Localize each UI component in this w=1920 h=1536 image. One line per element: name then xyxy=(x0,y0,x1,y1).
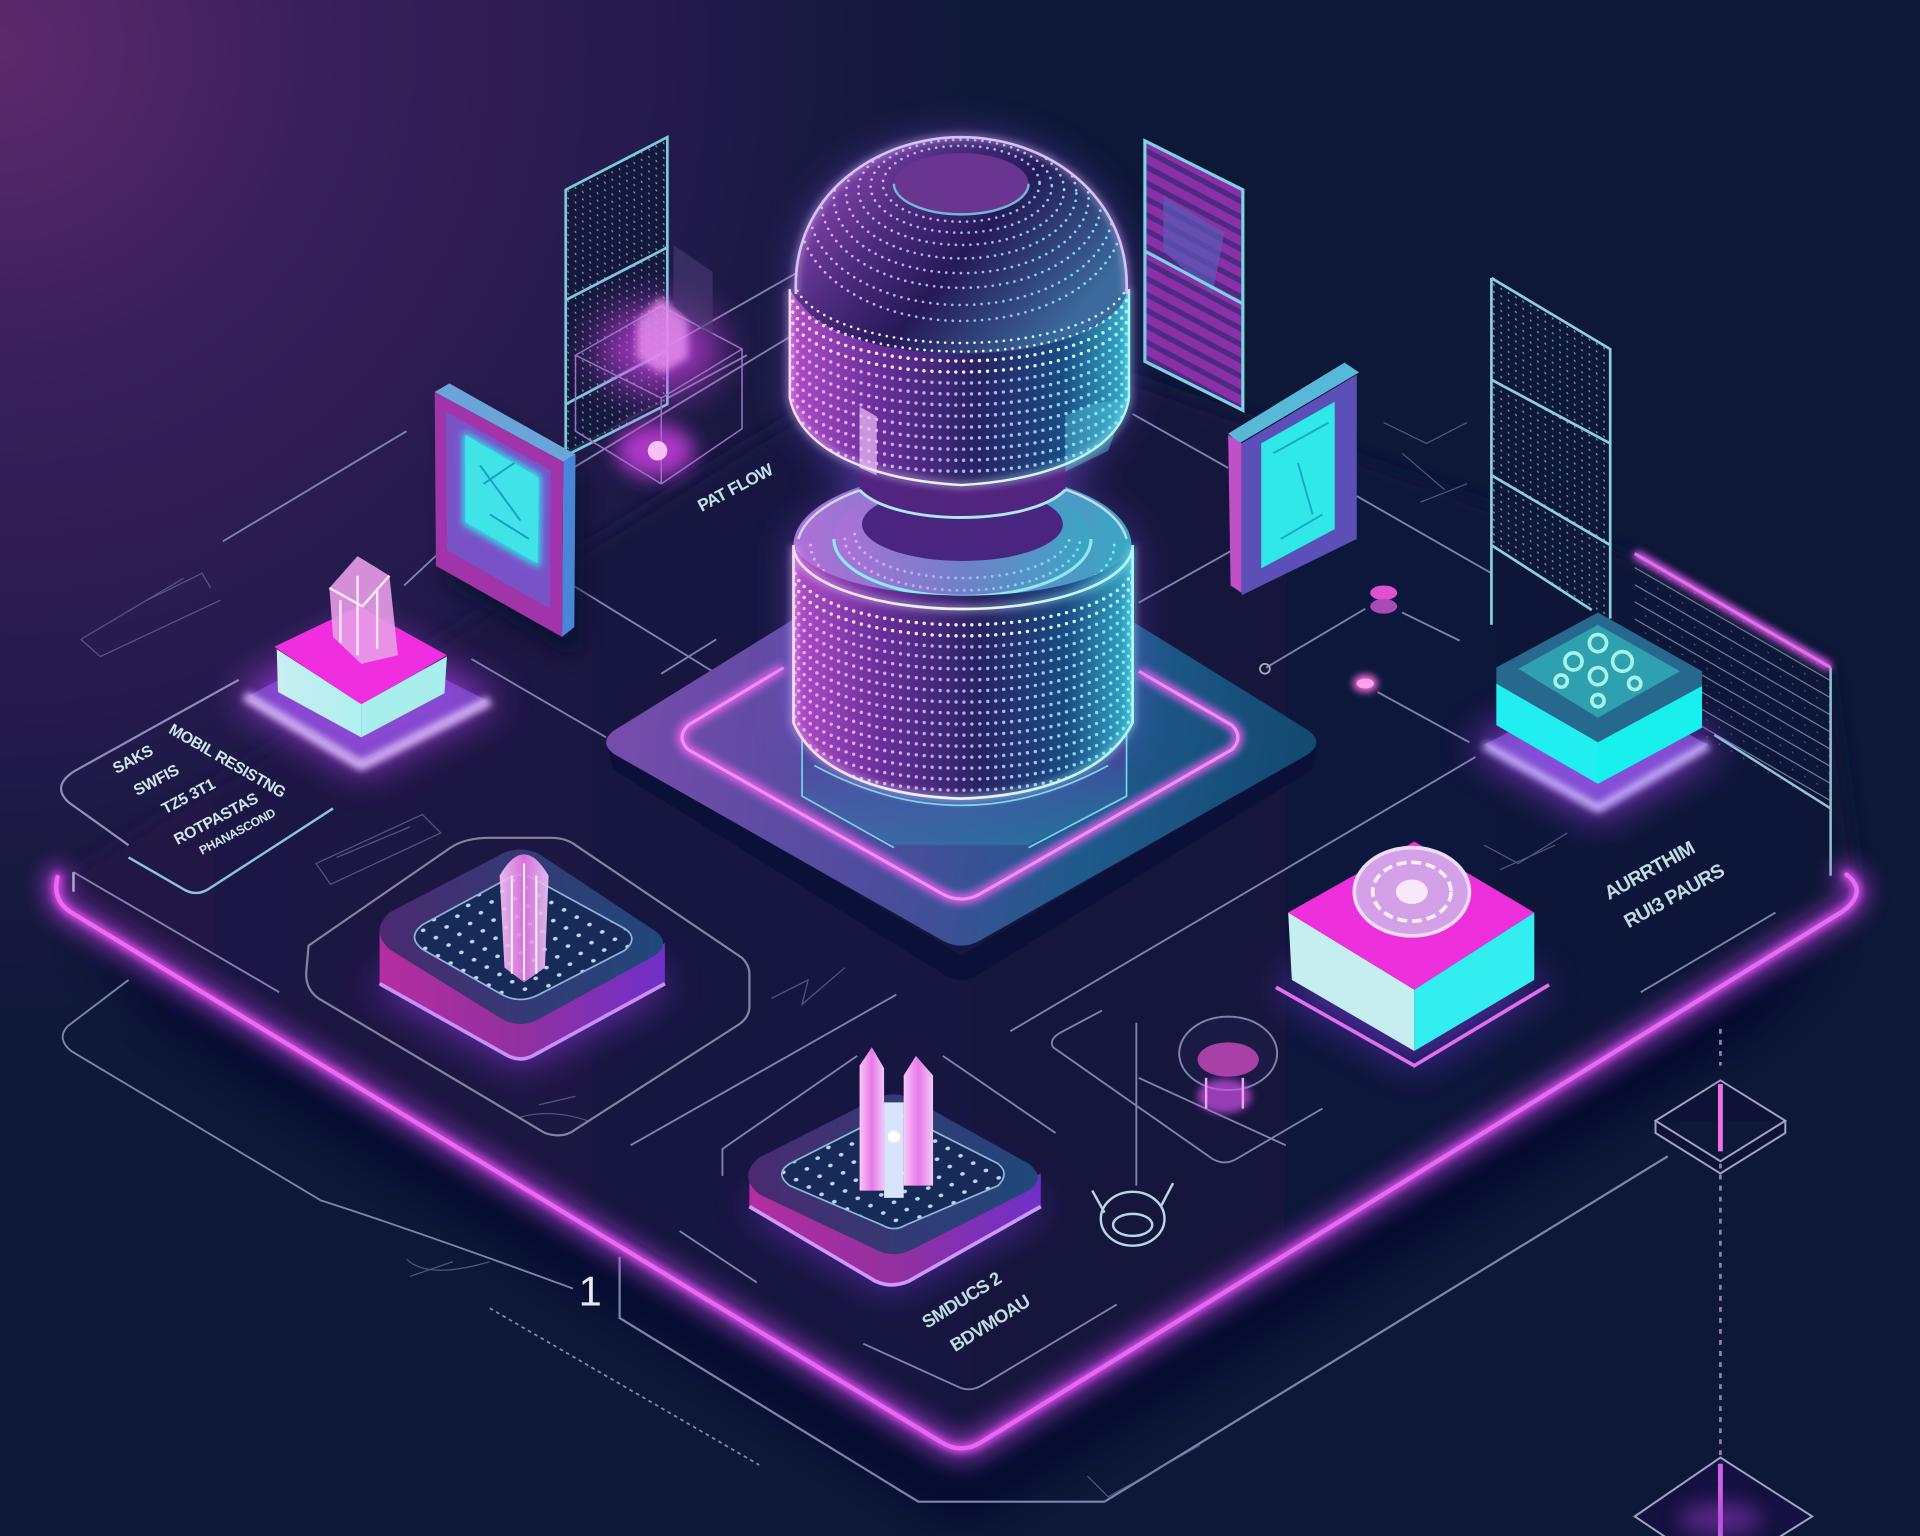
icon: right tall data panel xyxy=(1491,278,1610,625)
central dotted hologram tower xyxy=(790,110,1133,848)
module: cyan data cube xyxy=(1469,612,1722,818)
card text lines: SWFIS xyxy=(131,762,182,800)
module: processor A xyxy=(306,838,749,1135)
platform shadow xyxy=(73,937,1837,1519)
card text lines: MOBIL RESISTNG xyxy=(166,721,288,802)
crystal xyxy=(329,556,398,664)
connector scribble annotations xyxy=(81,423,1567,1497)
label: upper left caption: PAT FLOW xyxy=(694,459,777,516)
icon: left wire panel xyxy=(566,137,667,456)
tower spires xyxy=(500,854,549,982)
card text lines: PHANASCOND xyxy=(197,806,278,858)
card text lines xyxy=(110,721,288,858)
module: magenta medallion cube xyxy=(1273,841,1549,1066)
tower reflection xyxy=(802,723,1127,848)
icon: coil ring xyxy=(1179,1017,1277,1113)
neon platform edge xyxy=(56,875,1857,1448)
tower glow xyxy=(790,137,1133,802)
platform surface xyxy=(56,318,1859,1451)
dome xyxy=(793,110,1129,354)
central base slab xyxy=(606,522,1318,980)
icon: right tablet xyxy=(1228,363,1359,595)
icon: pink node dots xyxy=(1260,585,1397,692)
label: right caption xyxy=(1601,837,1729,933)
far right grid wall xyxy=(1635,554,1831,876)
lower cylinder xyxy=(793,472,1133,799)
icon: left tablet xyxy=(435,383,585,657)
tower neck xyxy=(860,404,1065,518)
icon: diamond beacon lower xyxy=(1635,1458,1812,1536)
panel: left text card xyxy=(61,680,333,893)
label: bottom caption: SMDUCS 2 xyxy=(918,1267,1005,1332)
module: small magenta cube with crystal xyxy=(233,556,502,774)
module: processor B xyxy=(747,1047,1043,1289)
card text lines: TZ5 3T1 xyxy=(159,776,218,818)
icon: glowing purple holo cube xyxy=(576,245,742,484)
label: bottom caption: BDVMOAU xyxy=(946,1290,1034,1356)
icon: right striped panel xyxy=(1145,141,1243,410)
medallion xyxy=(1354,848,1469,936)
circuit connector lines xyxy=(63,272,1776,1502)
label: right caption: AURRTHIM xyxy=(1601,837,1698,905)
label: bottom caption xyxy=(918,1267,1034,1356)
card text lines: SAKS xyxy=(110,743,156,778)
number marker: 1 xyxy=(579,1268,602,1315)
upper cylinder xyxy=(790,289,1129,485)
card text lines: ROTPASTAS xyxy=(171,790,261,849)
tower spires xyxy=(860,1047,933,1198)
icon: small robot ring xyxy=(1092,1183,1173,1246)
small corner post xyxy=(72,872,74,892)
icon: diamond beacon upper xyxy=(1656,1029,1785,1458)
label: right caption: RUI3 PAURS xyxy=(1620,859,1729,933)
